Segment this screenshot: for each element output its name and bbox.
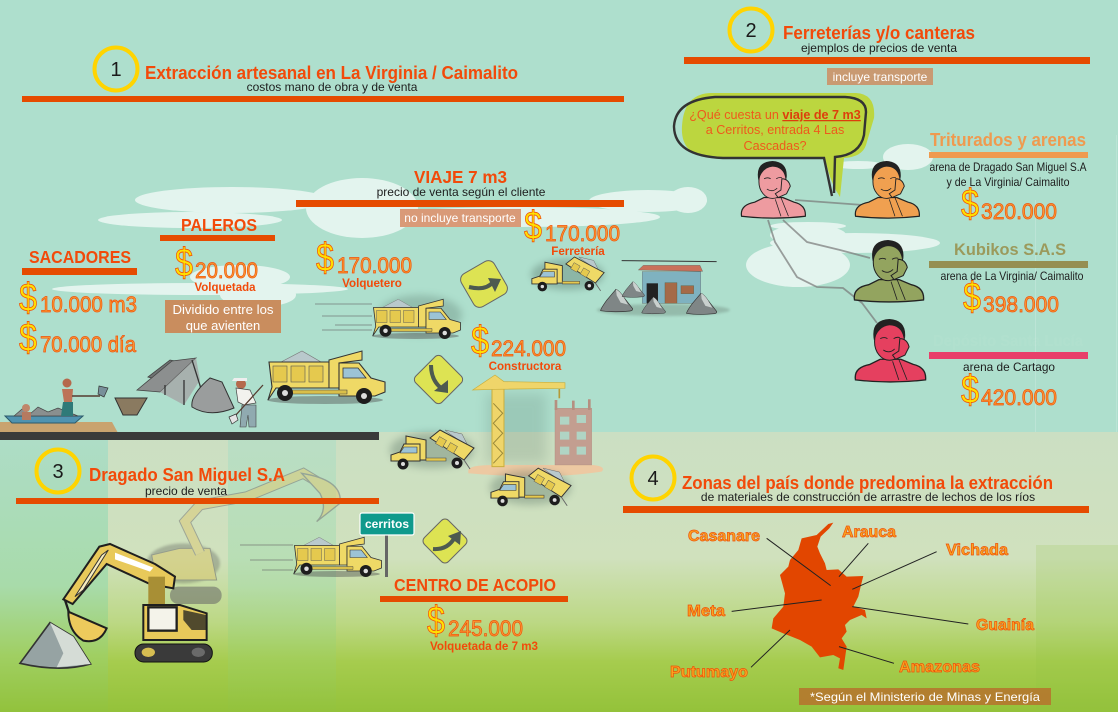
paleros: PALEROS bbox=[181, 215, 257, 235]
ground line and riverbank bbox=[0, 422, 379, 440]
viaje 7 m3 bbox=[296, 167, 624, 227]
icon: pink woman on phone bbox=[741, 161, 805, 218]
badge 4: 4 bbox=[647, 468, 659, 490]
panel 1: extraction bbox=[0, 48, 730, 506]
gravel heap bbox=[20, 623, 91, 668]
footnote source bbox=[799, 688, 1051, 705]
icon: red woman on phone bbox=[855, 319, 926, 382]
price volquetero: $ bbox=[316, 236, 334, 280]
hardware store with heaps bbox=[597, 261, 730, 316]
background: mint sky bbox=[0, 0, 1118, 432]
dump truck to construction left bbox=[390, 430, 474, 470]
arrow sign: down bbox=[412, 353, 465, 406]
heading 1: Extracción artesanal en La Virginia / Caimalito bbox=[145, 62, 518, 83]
vendor: Kubikos S.A.S: Kubikos S.A.S bbox=[954, 240, 1066, 259]
illustration: moving truck bbox=[315, 295, 462, 339]
centro de acopio: Volquetada de 7 m3 bbox=[430, 640, 539, 653]
viaje 7 m3: precio de venta según el cliente bbox=[377, 185, 546, 199]
subtitle 2: ejemplos de precios de venta bbox=[801, 41, 957, 55]
vendor: Cartago bbox=[929, 333, 1088, 412]
paleros: $ bbox=[175, 241, 193, 285]
panel 2: hardware stores bbox=[674, 8, 1090, 412]
vendor: Triturados y arenas bbox=[929, 130, 1088, 226]
paleros: Volquetada bbox=[194, 281, 256, 294]
speech bubble: Cascadas? bbox=[743, 139, 807, 153]
moving truck to cerritos bbox=[240, 537, 382, 577]
badge 3: 3 bbox=[52, 461, 64, 483]
region label: Casanare: Casanare bbox=[688, 528, 760, 545]
connecting lines bbox=[768, 200, 877, 323]
sacadores: $ bbox=[19, 276, 37, 320]
centro de acopio: 245.000 bbox=[448, 616, 523, 641]
ghost excavator bbox=[147, 473, 340, 604]
viaje 7 m3: no incluye transporte bbox=[404, 211, 516, 225]
price ferreteria bbox=[524, 204, 620, 258]
road sign: cerritos: cerritos bbox=[365, 517, 409, 531]
vendor: Kubikos S.A.S: arena de La Virginia/ Caimalito bbox=[940, 269, 1084, 283]
heading 2: Ferreterías y/o canteras bbox=[783, 22, 975, 43]
price constructora: 224.000 bbox=[491, 336, 566, 361]
price constructora: Constructora bbox=[489, 360, 562, 373]
subtitle 4: de materiales de construcción de arrastre de lechos de los ríos bbox=[701, 490, 1035, 504]
dump truck to ferreteria bbox=[531, 257, 604, 291]
paleros: Dividido entre los bbox=[172, 302, 274, 317]
vendor: Triturados y arenas: Triturados y arenas bbox=[930, 130, 1086, 150]
speech bubble: a Cerritos, entrada 4 Las bbox=[706, 123, 844, 137]
vendor: Kubikos S.A.S: $ bbox=[963, 275, 981, 319]
icon: green woman on phone bbox=[854, 240, 924, 302]
price volquetero: 170.000 bbox=[337, 253, 412, 278]
footnote source: *Según el Ministerio de Minas y Energía bbox=[810, 690, 1040, 704]
price constructora: $ bbox=[471, 319, 489, 363]
price ferreteria: 170.000 bbox=[545, 221, 620, 246]
illustration: sacador in boat bbox=[5, 378, 108, 423]
vendor: Triturados y arenas: arena de Dragado San Miguel S.A bbox=[930, 160, 1086, 174]
sacadores: 10.000 m3 bbox=[40, 292, 137, 317]
arrow sign: right curve bbox=[458, 258, 510, 310]
paleros: que avienten bbox=[186, 318, 260, 333]
badge 2 bbox=[730, 8, 772, 52]
map leader lines bbox=[732, 538, 968, 667]
centro de acopio: $ bbox=[427, 599, 445, 643]
heading 3: Dragado San Miguel S.A bbox=[89, 464, 285, 485]
illustration: sifter and sand heap bbox=[115, 358, 234, 415]
region label: Arauca: Arauca bbox=[842, 524, 896, 541]
badge 2: 2 bbox=[745, 20, 757, 42]
speech bubble: ¿Qué cuesta un viaje de 7 m3 bbox=[689, 108, 861, 122]
speech bubble bbox=[674, 93, 874, 197]
badge 1: 1 bbox=[110, 59, 122, 81]
vendor: Cartago: 420.000 bbox=[981, 385, 1057, 410]
heading 4: Zonas del país donde predomina la extracción bbox=[682, 472, 1053, 493]
region label: Vichada: Vichada bbox=[946, 542, 1008, 559]
vendor: Triturados y arenas: 320.000 bbox=[981, 199, 1057, 224]
vendor: Triturados y arenas: $ bbox=[961, 182, 979, 226]
sacadores: SACADORES bbox=[29, 247, 131, 267]
vendor: Triturados y arenas: y de La Virginia/ Caimalito bbox=[946, 175, 1070, 189]
region label: Meta: Meta bbox=[687, 603, 725, 620]
vendor: Cartago: arena de Cartago bbox=[963, 360, 1055, 374]
price constructora bbox=[471, 319, 566, 373]
region label: Putumayo: Putumayo bbox=[670, 664, 748, 681]
icon: orange woman on phone bbox=[855, 161, 919, 218]
price volquetero: Volquetero bbox=[342, 277, 402, 290]
paleros bbox=[160, 215, 281, 333]
centro de acopio bbox=[380, 575, 568, 653]
badge 4 bbox=[632, 456, 674, 500]
arrow sign: right curve lower bbox=[421, 517, 469, 565]
background: watercolour meadow bbox=[0, 432, 1118, 712]
vendor: Cartago: $ bbox=[961, 368, 979, 412]
badge 3 bbox=[36, 450, 80, 492]
clouds bbox=[52, 144, 940, 307]
price volquetero bbox=[316, 236, 412, 290]
price ferreteria: Ferretería bbox=[551, 245, 605, 258]
vendor: Cartago: Depósito Santa Lucía bbox=[933, 333, 1083, 350]
road sign: cerritos bbox=[360, 513, 414, 577]
price ferreteria: $ bbox=[524, 204, 542, 248]
badge 1 bbox=[94, 48, 138, 90]
vendor: Kubikos S.A.S: 398.000 bbox=[983, 292, 1059, 317]
viaje 7 m3: VIAJE 7 m3 bbox=[414, 167, 507, 187]
panel 4: zones of the country bbox=[623, 456, 1089, 705]
crane and building under construction bbox=[468, 375, 603, 476]
sacadores: 70.000 día bbox=[40, 332, 137, 357]
illustration: palero worker bbox=[229, 378, 263, 427]
subtitle 3: precio de venta bbox=[145, 484, 227, 498]
region label: Guainía: Guainía bbox=[976, 617, 1034, 634]
dump truck to construction right bbox=[490, 468, 571, 506]
map of Colombia bbox=[772, 523, 867, 670]
illustration: main truck bbox=[267, 351, 385, 404]
panel 3: dredging company bbox=[16, 450, 568, 668]
excavator bbox=[63, 544, 212, 662]
sacadores bbox=[19, 247, 137, 360]
paleros: 20.000 bbox=[195, 258, 258, 283]
centro de acopio: CENTRO DE ACOPIO bbox=[394, 575, 556, 595]
subtitle 1: costos mano de obra y de venta bbox=[247, 80, 418, 94]
vendor: Kubikos S.A.S bbox=[929, 240, 1088, 319]
sacadores: $ bbox=[19, 316, 37, 360]
region label: Amazonas: Amazonas bbox=[899, 659, 980, 676]
tag: incluye transporte: incluye transporte bbox=[833, 70, 928, 84]
